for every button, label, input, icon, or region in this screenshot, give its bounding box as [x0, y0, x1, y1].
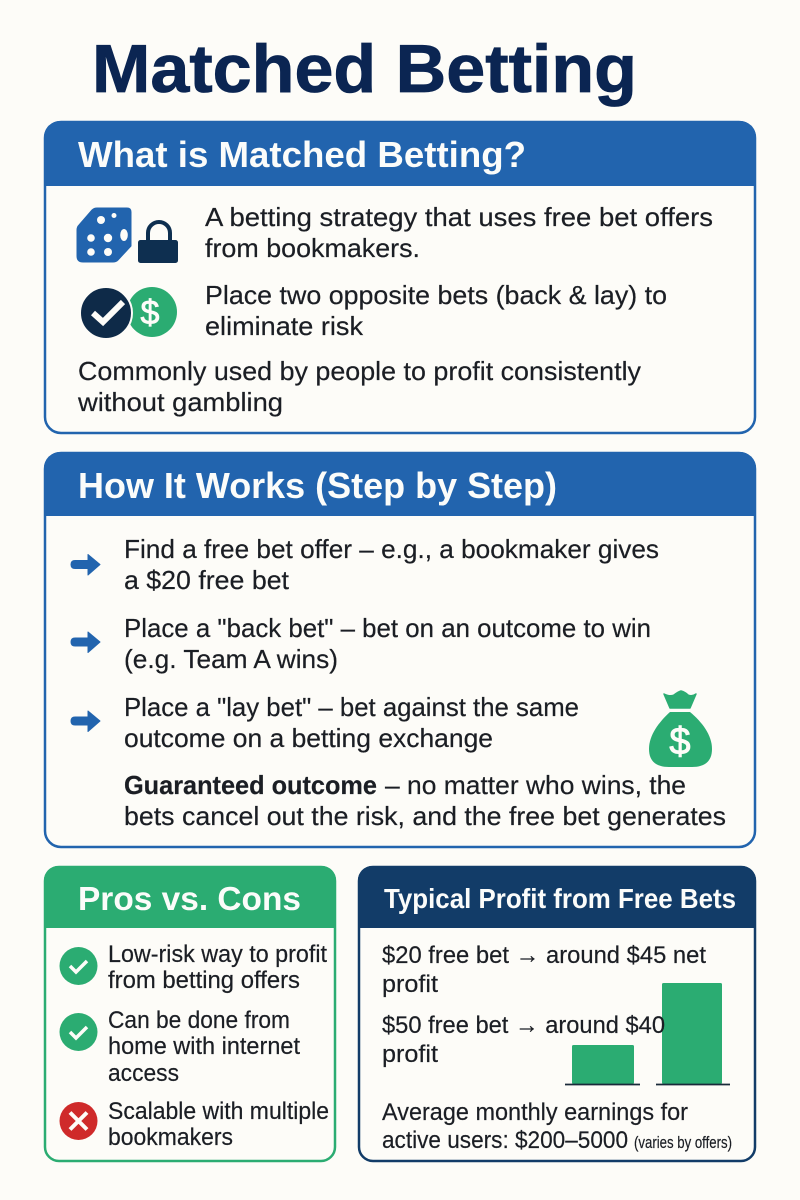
- header: what is matched betting: What is Matched Betting?: [78, 134, 526, 175]
- text: pro 1: from betting offers: [108, 967, 300, 994]
- text: commonly used: Commonly used by people to profit consistently: [78, 356, 641, 386]
- text: $20 free bet: profit: [382, 971, 438, 998]
- text: $20 free bet: [382, 942, 706, 998]
- text: two opposite bets: [205, 280, 667, 341]
- text: step 2: Place a "back bet" – bet on an outcome to win: [124, 613, 651, 643]
- icon: money bag: $: [669, 721, 691, 763]
- header: what is matched betting: [44, 121, 756, 186]
- text: commonly used: without gambling: [77, 387, 283, 417]
- text: $50 free bet: $50 free bet → around $40: [382, 1012, 665, 1039]
- panel: what is matched betting: [44, 121, 756, 433]
- header: how it works: How It Works (Step by Step): [78, 465, 557, 506]
- header: pros vs cons: Pros vs. Cons: [78, 880, 301, 917]
- text: step 2: [124, 613, 651, 674]
- text: commonly used: [77, 356, 641, 417]
- header: typical profit: [358, 866, 756, 928]
- arrow: step 3: [71, 711, 100, 732]
- text: average monthly earnings: (varies by offers): [634, 1133, 732, 1152]
- icon: check and dollar coins: $: [141, 294, 160, 332]
- icon: check and dollar coins: [80, 287, 177, 339]
- text: step 2: (e.g. Team A wins): [124, 644, 338, 674]
- text: average monthly earnings: Average monthly earnings for: [382, 1099, 688, 1126]
- title: Matched Betting: [92, 31, 637, 107]
- header: pros vs cons: [44, 866, 336, 928]
- arrow: step 2: [71, 632, 100, 652]
- text: guaranteed outcome: Guaranteed outcome: [124, 770, 377, 800]
- text: betting strategy: [205, 202, 713, 263]
- text: guaranteed outcome: [124, 770, 726, 831]
- icon: cross: [60, 1102, 98, 1140]
- text: $50 free bet: [382, 1012, 665, 1068]
- icon: money bag: [649, 691, 712, 767]
- panel: pros vs cons: [44, 866, 336, 1161]
- text: step 1: [124, 534, 659, 595]
- text: pro 2: Can be done from: [108, 1007, 290, 1034]
- text: betting strategy: from bookmakers.: [205, 233, 420, 263]
- text: $50 free bet: profit: [382, 1041, 438, 1068]
- text: average monthly earnings: active users: $200–5000: [382, 1127, 628, 1154]
- text: step 3: outcome on a betting exchange: [124, 723, 493, 753]
- text: two opposite bets: Place two opposite bets (back & lay) to: [205, 280, 667, 310]
- bar chart: [565, 983, 730, 1084]
- text: con: bookmakers: [108, 1124, 233, 1151]
- text: con: Scalable with multiple: [108, 1098, 329, 1125]
- text: guaranteed outcome: bets cancel out the risk, and the free bet generates: [124, 801, 726, 831]
- text: average monthly earnings: [382, 1099, 732, 1154]
- text: step 1: a $20 free bet: [124, 565, 290, 595]
- header: how it works: [44, 452, 756, 516]
- text: pro 1: Low-risk way to profit: [108, 941, 327, 968]
- text: con: [108, 1098, 329, 1151]
- text: pro 2: [108, 1007, 300, 1087]
- header: typical profit: Typical Profit from Free Bets: [384, 883, 736, 914]
- text: pro 2: home with internet: [108, 1033, 300, 1060]
- text: $20 free bet: $20 free bet → around $45 net: [382, 942, 706, 969]
- text: step 3: Place a "lay bet" – bet against the same: [124, 692, 579, 722]
- text: pro 1: [108, 941, 327, 994]
- text: step 3: [124, 692, 579, 753]
- icon: padlock: [138, 222, 178, 263]
- icon: check 2: [60, 1013, 98, 1051]
- arrow: step 1: [71, 554, 100, 575]
- text: two opposite bets: eliminate risk: [205, 311, 364, 341]
- text: betting strategy: A betting strategy that uses free bet offers: [205, 202, 713, 232]
- text: pro 2: access: [108, 1060, 179, 1087]
- icon: dice: [77, 208, 131, 262]
- icon: check 1: [60, 947, 98, 985]
- panel: how it works: [44, 452, 756, 847]
- panel: typical profit: [358, 866, 756, 1161]
- text: guaranteed outcome: – no matter who wins, the: [385, 770, 686, 800]
- text: step 1: Find a free bet offer – e.g., a bookmaker gives: [124, 534, 659, 564]
